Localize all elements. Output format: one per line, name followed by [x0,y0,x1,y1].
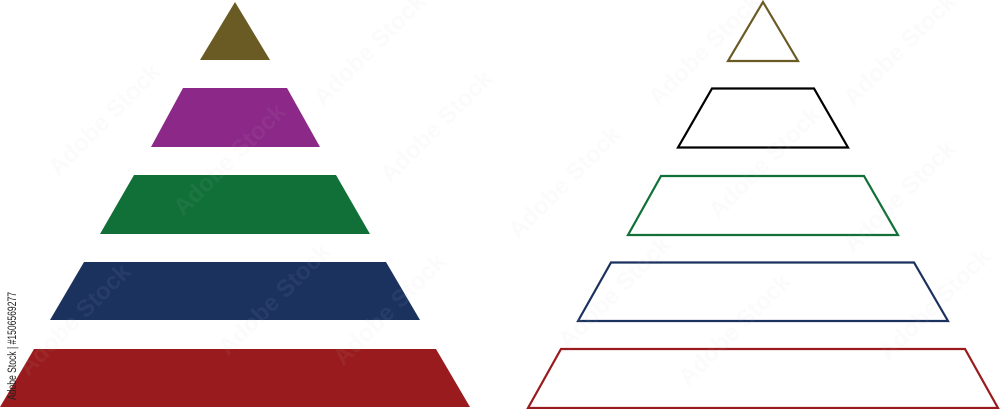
watermarks: Adobe Stock [553,231,677,354]
filled tier 5: red trapezoid [0,349,470,407]
filled tier 1: olive triangle [200,2,270,60]
outlined pyramid [528,2,998,408]
filled tier 3: green trapezoid [100,175,370,234]
filled tier 4: navy trapezoid [50,262,420,320]
filled tier 2: purple trapezoid [151,88,320,147]
outline tier 5: red trapezoid [528,349,998,408]
filled pyramid [0,2,470,407]
watermarks: Adobe Stock [375,65,499,188]
outline tier 3: green trapezoid [628,176,898,235]
watermarks: Adobe Stock [168,98,292,221]
outline tier 1: olive triangle [728,2,798,61]
watermarks: Adobe Stock [213,238,337,361]
watermarks: Adobe Stock [328,248,452,371]
watermarks: Adobe Stock [703,101,827,224]
watermarks: Adobe Stock [43,58,167,181]
watermarks: Adobe Stock [503,121,627,244]
watermarks: Adobe Stock [873,243,997,366]
stock id label: Adobe Stock | #1506569277 [7,292,19,400]
watermarks: Adobe Stock [838,135,962,258]
outline tier 4: navy trapezoid [578,262,948,321]
outline tier 2: black trapezoid [678,88,848,148]
watermarks: Adobe Stock [13,258,137,381]
watermarks: Adobe Stock [673,268,797,391]
